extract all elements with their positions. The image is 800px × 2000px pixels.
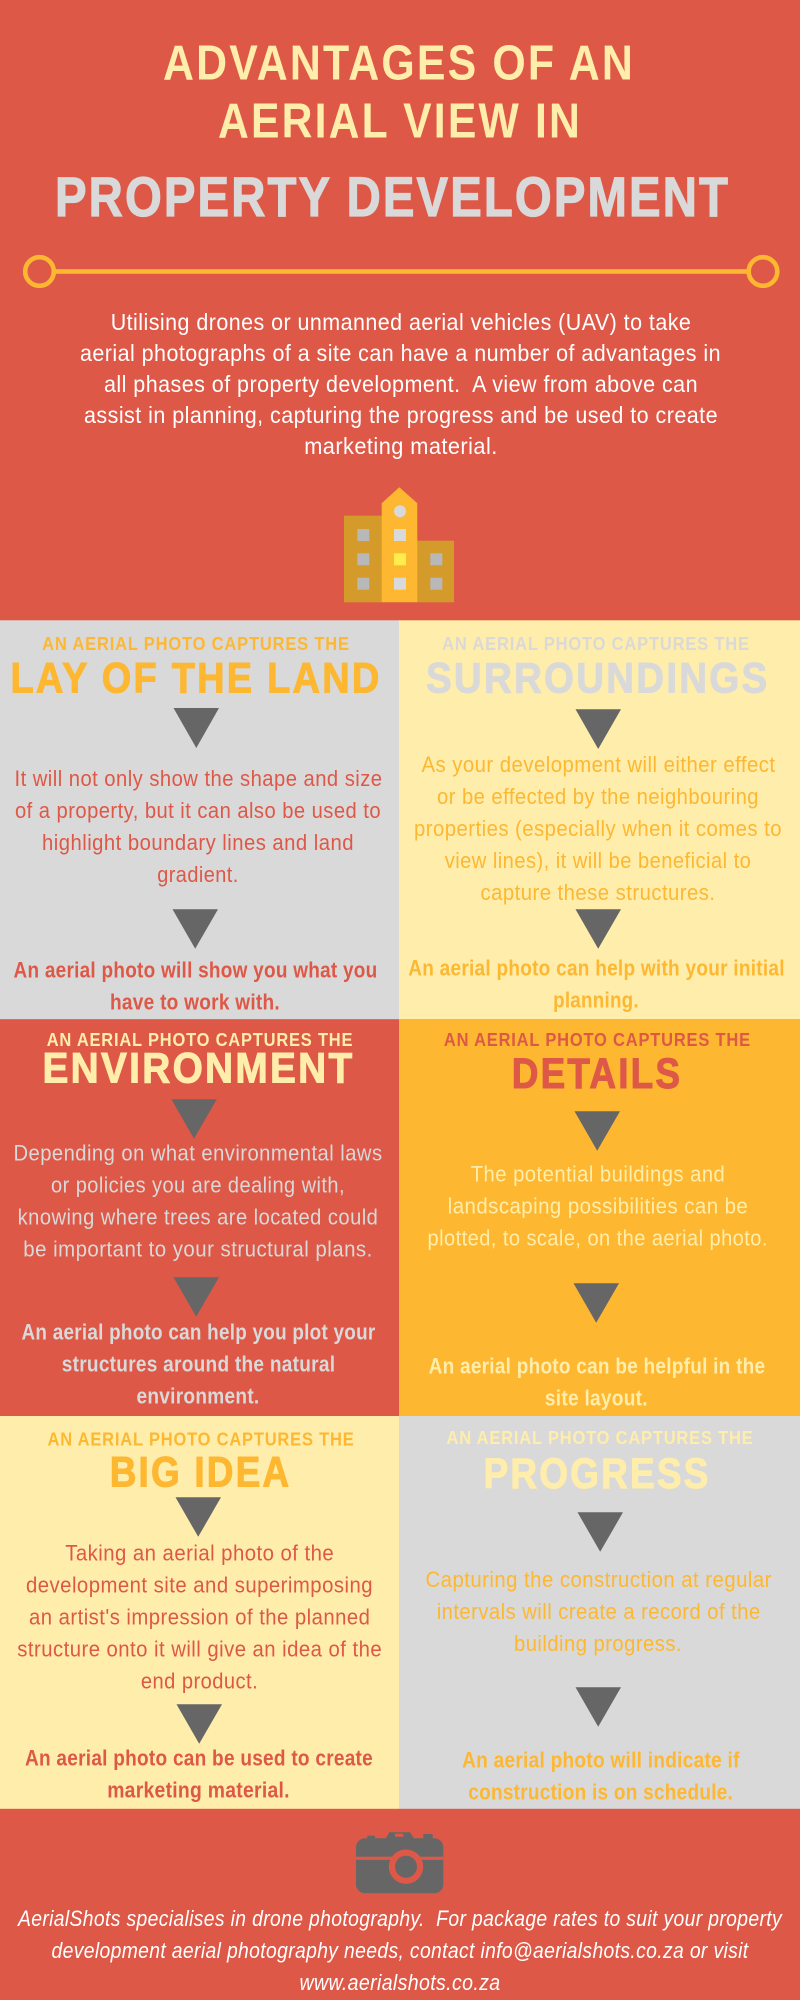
body text: knowing where trees are located could — [18, 1205, 378, 1230]
body text: gradient. — [157, 862, 239, 887]
panel: progress — [399, 1416, 800, 1809]
takeaway text: have to work with. — [110, 990, 280, 1015]
body text: intervals will create a record of the — [437, 1599, 761, 1624]
arrow — [574, 1283, 619, 1323]
takeaway text — [25, 1746, 373, 1802]
body text: Capturing the construction at regular — [426, 1567, 772, 1592]
body text: development site and superimposing — [26, 1572, 373, 1598]
body text — [14, 1141, 382, 1262]
takeaway text: planning. — [553, 988, 639, 1013]
heading: details: DETAILS — [512, 1050, 682, 1098]
takeaway text: structures around the natural — [62, 1351, 335, 1376]
heading: environment: ENVIRONMENT — [42, 1045, 354, 1093]
body text: Taking an aerial photo of the — [65, 1540, 334, 1566]
label: details kicker: AN AERIAL PHOTO CAPTURES THE — [444, 1029, 751, 1050]
body text: end product. — [141, 1668, 258, 1693]
divider line with end rings — [25, 257, 777, 286]
panel: environment — [0, 1019, 399, 1416]
body text: highlight boundary lines and land — [42, 830, 354, 855]
arrow — [171, 1099, 217, 1139]
takeaway text: An aerial photo can help you plot your — [22, 1319, 376, 1344]
body text — [17, 1540, 382, 1693]
panel: lay of the land — [0, 620, 399, 1019]
arrow — [574, 1111, 620, 1151]
body text — [428, 1162, 768, 1251]
arrow — [172, 909, 218, 949]
intro paragraph: aerial photographs of a site can have a number of advantages in — [80, 340, 721, 366]
intro paragraph: Utilising drones or unmanned aerial vehicles (UAV) to take — [111, 309, 691, 335]
body text: an artist's impression of the planned — [29, 1604, 370, 1629]
body text: of a property, but it can also be used to — [15, 798, 381, 823]
arrow — [176, 1704, 222, 1744]
title: ADVANTAGES OF AN — [163, 37, 635, 91]
takeaway text: site layout. — [545, 1385, 648, 1410]
intro paragraph — [80, 309, 721, 459]
heading: big idea: BIG IDEA — [110, 1448, 291, 1496]
panel: big idea — [0, 1416, 399, 1809]
body text: landscaping possibilities can be — [448, 1194, 748, 1219]
heading: surroundings: SURROUNDINGS — [426, 655, 769, 703]
footer text: www.aerialshots.co.za — [300, 1970, 500, 1995]
takeaway text: marketing material. — [107, 1778, 290, 1802]
takeaway text: environment. — [136, 1383, 260, 1408]
body text — [414, 752, 782, 905]
heading: progress: PROGRESS — [484, 1450, 710, 1498]
body text: building progress. — [514, 1631, 682, 1656]
title — [55, 37, 730, 228]
label: progress kicker: AN AERIAL PHOTO CAPTURES THE — [446, 1427, 754, 1448]
arrow — [576, 709, 621, 749]
body text: capture these structures. — [480, 880, 716, 905]
intro paragraph: all phases of property development. A view from above can — [104, 371, 698, 397]
body text: or policies you are dealing with, — [51, 1173, 345, 1198]
body text: Depending on what environmental laws — [14, 1141, 382, 1166]
body text: plotted, to scale, on the aerial photo. — [428, 1226, 768, 1251]
takeaway text: construction is on schedule. — [468, 1779, 733, 1804]
body text: As your development will either effect — [422, 752, 776, 777]
body text: It will not only show the shape and size — [14, 766, 382, 791]
body text — [426, 1567, 772, 1656]
takeaway text — [429, 1353, 765, 1410]
panel: details — [399, 1019, 800, 1416]
label: lay of the land kicker: AN AERIAL PHOTO CAPTURES THE — [42, 633, 350, 654]
panel: surroundings — [399, 620, 800, 1019]
label: surroundings kicker: AN AERIAL PHOTO CAPTURES THE — [442, 633, 750, 654]
body text: or be effected by the neighbouring — [437, 784, 759, 809]
arrow — [576, 1687, 621, 1727]
icon: buildings — [344, 487, 454, 602]
intro paragraph: assist in planning, capturing the progress and be used to create — [84, 402, 718, 428]
body text — [14, 766, 382, 887]
takeaway text: An aerial photo can be used to create — [25, 1746, 373, 1770]
body text: be important to your structural plans. — [23, 1237, 373, 1262]
icon: camera — [356, 1832, 443, 1893]
arrow — [576, 909, 621, 949]
body text: structure onto it will give an idea of the — [17, 1636, 382, 1661]
takeaway text — [14, 958, 378, 1015]
title: AERIAL VIEW IN — [218, 94, 582, 148]
takeaway text: An aerial photo will indicate if — [462, 1747, 740, 1772]
arrow — [174, 708, 219, 748]
arrow — [174, 1277, 219, 1317]
takeaway text: An aerial photo will show you what you — [14, 958, 378, 983]
footer text — [16, 1906, 783, 1995]
body text: The potential buildings and — [471, 1162, 725, 1187]
label: environment kicker: AN AERIAL PHOTO CAPTURES THE — [47, 1029, 353, 1050]
label: big idea kicker: AN AERIAL PHOTO CAPTURES THE — [48, 1428, 354, 1449]
arrow — [578, 1512, 623, 1552]
body text: view lines), it will be beneficial to — [445, 848, 751, 873]
takeaway text — [462, 1747, 740, 1804]
heading: lay of the land: LAY OF THE LAND — [10, 655, 382, 703]
intro paragraph: marketing material. — [304, 433, 498, 459]
takeaway text — [22, 1319, 376, 1408]
takeaway text — [408, 956, 785, 1013]
arrow — [176, 1497, 221, 1537]
